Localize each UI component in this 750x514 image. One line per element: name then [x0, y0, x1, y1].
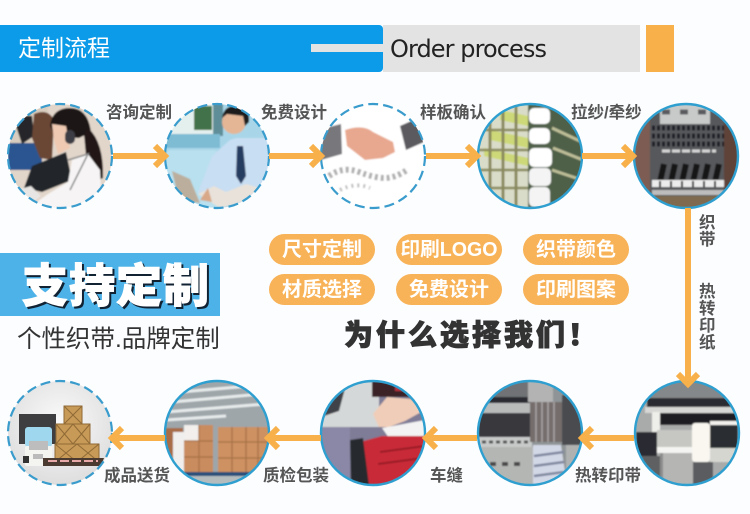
step 10: delivery illustration [8, 381, 112, 485]
panel: option pills: 材质选择 [282, 278, 362, 301]
vertical label: 热转印纸: 热 [699, 282, 716, 301]
panel: option pills: 织带颜色 [536, 238, 616, 261]
vertical label: 织带 [699, 213, 716, 249]
step 10 label: 成品送货 [104, 465, 170, 485]
step 8: sewing photo [321, 381, 425, 485]
arrows: process flow [112, 146, 698, 448]
vertical label: 热转印纸: 转 [699, 299, 716, 318]
step 2: design photo [165, 104, 272, 208]
subtitle: 个性织带.品牌定制 [17, 325, 220, 353]
step 7 ring [478, 381, 582, 485]
heading: why choose us: 为什么选择我们！ [344, 319, 600, 352]
step 8 label: 车缝 [430, 465, 464, 485]
step 1: consultation photo [8, 104, 112, 210]
step 3: handshake photo [322, 120, 424, 192]
icon: flatbed [43, 458, 104, 466]
step 2 label: 免费设计 [261, 103, 327, 122]
panel: option pills: 印刷LOGO [400, 238, 498, 261]
step 7: heat-transfer photo [478, 381, 582, 485]
step 5 ring [634, 104, 738, 208]
step 5: weaving machine photo [634, 104, 738, 208]
panel: custom banner: 支持定制 [22, 260, 210, 312]
step 4 ring [478, 104, 582, 208]
header bar [0, 25, 674, 72]
step 10 ring [8, 381, 112, 485]
icon: crates [55, 406, 99, 462]
vertical label: 热转印纸: 印 [699, 316, 716, 335]
panel: option pills [269, 234, 629, 305]
step 1 ring [8, 104, 112, 208]
step 4: yarn photo [478, 104, 583, 208]
vertical label: 热转印纸 [699, 282, 716, 352]
step 4 label: 拉纱/牵纱 [571, 102, 642, 122]
step 6: printer photo [635, 381, 739, 485]
step 8 ring [321, 381, 425, 485]
step 3 label: 样板确认 [420, 102, 486, 122]
step 3 ring [321, 104, 425, 208]
step 9 ring [165, 381, 269, 485]
step 9: warehouse photo [165, 381, 269, 485]
panel: option pills: 印刷图案 [536, 278, 616, 301]
icon: truck [19, 414, 56, 466]
vertical label: 织带: 带 [699, 230, 716, 249]
step 2 ring [165, 104, 269, 208]
vertical label: 热转印纸: 纸 [699, 332, 716, 352]
panel: option pills: 免费设计 [409, 278, 489, 301]
step 6 ring [635, 381, 739, 485]
step 9 label: 质检包装 [263, 465, 330, 485]
step 1 label: 咨询定制 [106, 102, 172, 122]
panel: custom banner: 支持定制 [24, 262, 212, 314]
vertical label: 织带: 织 [699, 213, 716, 232]
step 7 label: 热转印带 [575, 466, 641, 485]
header bar: Order process [390, 35, 547, 63]
header bar: 定制流程 [18, 35, 110, 61]
panel: option pills: 尺寸定制 [282, 237, 362, 261]
